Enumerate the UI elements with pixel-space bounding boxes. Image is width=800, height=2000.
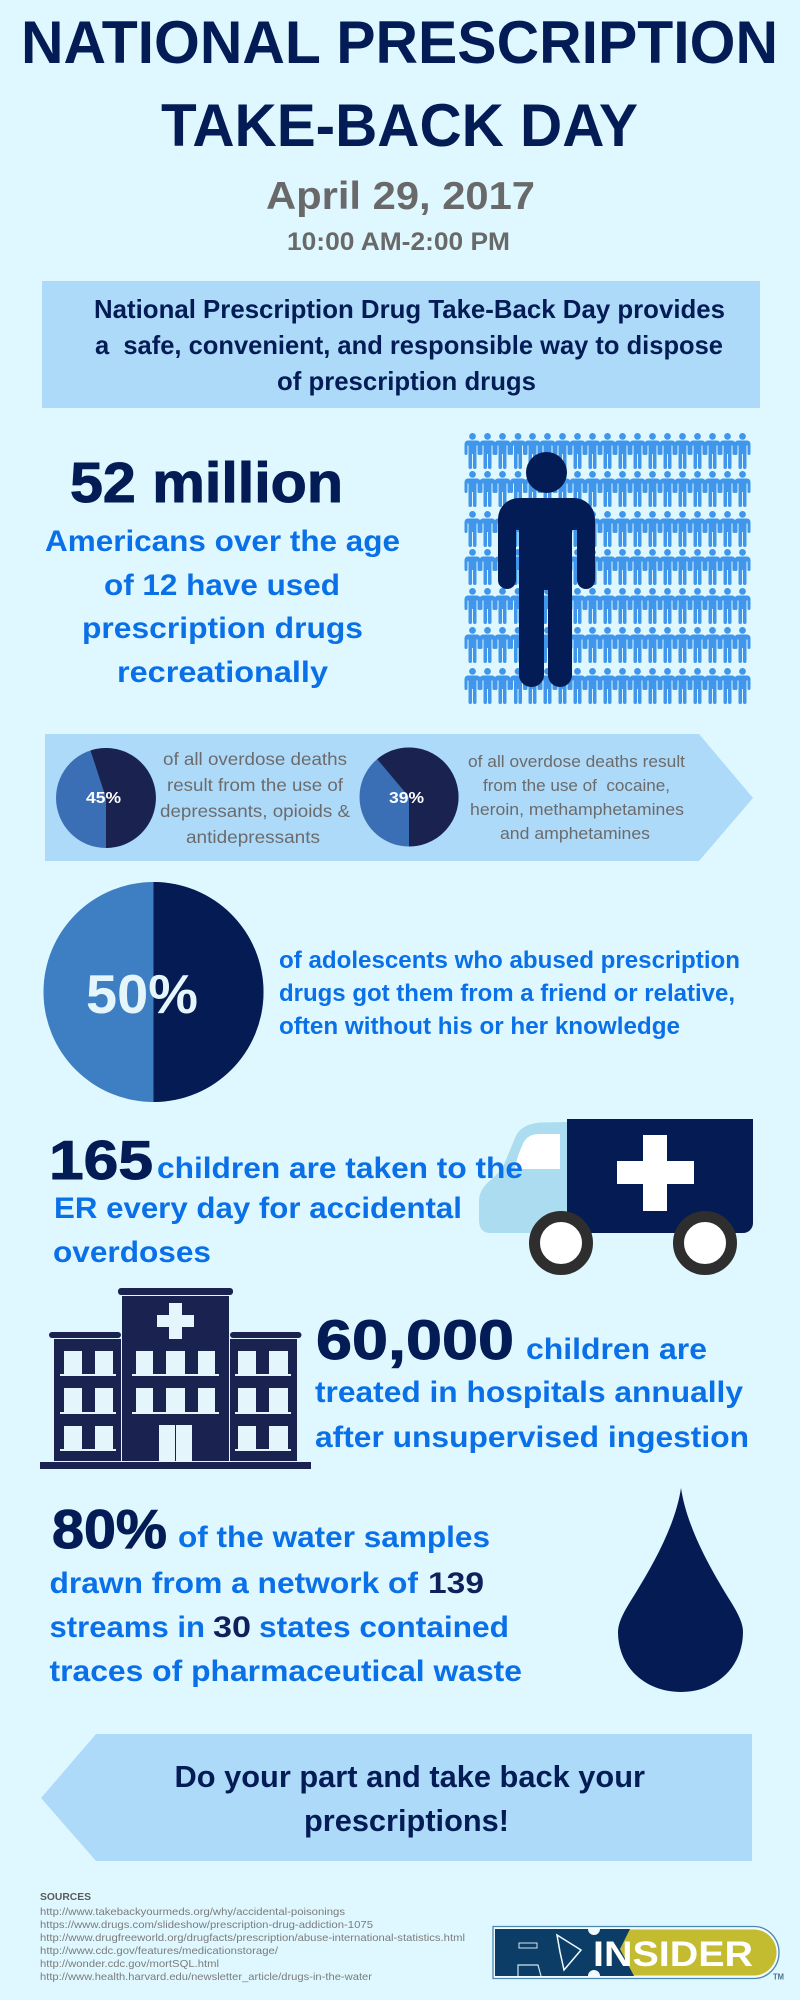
panel: introduction: of prescription drugs xyxy=(277,366,536,396)
text: Americans over the age of 12: recreationally xyxy=(117,656,328,689)
text: children treated in hospitals xyxy=(315,1333,749,1454)
text: Americans over the age of 12: Americans over the age xyxy=(45,525,400,558)
windows xyxy=(60,1303,291,1461)
pie chart: 45%: 45% xyxy=(86,790,121,807)
icon: water drop xyxy=(618,1488,743,1692)
icon: hospital xyxy=(40,1288,311,1469)
text: children treated in hospitals: after unsupervised ingestion xyxy=(315,1421,749,1454)
title: TAKE-BACK DAY xyxy=(161,92,638,159)
text: water samples: 30 xyxy=(213,1611,251,1644)
cross xyxy=(617,1135,694,1211)
sources: http://www.health.harvard.edu/newsletter_article/drugs-in-the-water xyxy=(40,1971,373,1983)
cab xyxy=(479,1122,567,1233)
stat: 60,000: 60,000 xyxy=(316,1308,514,1371)
text: cocaine: of all overdose deaths result xyxy=(468,753,685,771)
text: Americans over the age of 12 xyxy=(45,525,400,689)
panel: call to action arrow xyxy=(41,1734,752,1861)
text: water samples: 139 xyxy=(428,1567,484,1600)
text: depressants: antidepressants xyxy=(186,827,320,847)
pie chart: 50%: 50% xyxy=(86,963,198,1025)
text: water samples: states contained xyxy=(259,1611,509,1644)
text: water samples xyxy=(50,1521,522,1688)
R leg line xyxy=(518,1965,541,1976)
text: adolescents: often without his or her knowledge xyxy=(279,1013,680,1040)
pie chart: 45% xyxy=(56,748,156,848)
text: cocaine: and amphetamines xyxy=(500,825,650,843)
text: cocaine: heroin, methamphetamines xyxy=(470,801,684,819)
stat: 165: 165 xyxy=(49,1129,153,1191)
cargo box xyxy=(567,1119,753,1233)
text: children taken to the ER: ER every day for accidental xyxy=(54,1192,462,1225)
text: water samples: streams in xyxy=(50,1611,205,1644)
text: cocaine xyxy=(468,753,685,843)
icon: large person xyxy=(498,452,595,687)
trademark: TM xyxy=(773,1972,784,1982)
pill outline xyxy=(493,1926,779,1978)
panel: introduction: National Prescription Drug Take-Back Day provides xyxy=(94,294,725,324)
title: NATIONAL PRESCRIPTION xyxy=(21,9,778,76)
date: April 29, 2017 xyxy=(266,175,535,218)
icon: ambulance xyxy=(479,1119,753,1270)
panel: call to action arrow: prescriptions! xyxy=(304,1803,509,1838)
wordmark: INSIDER xyxy=(593,1935,753,1974)
text: depressants: depressants, opioids & xyxy=(160,801,350,821)
wheel xyxy=(678,1216,732,1270)
panel: introduction xyxy=(42,281,760,408)
text: Americans over the age of 12: of 12 have used xyxy=(104,569,340,602)
sources: http://www.takebackyourmeds.org/why/accidental-poisonings xyxy=(40,1906,345,1918)
text: depressants: of all overdose deaths xyxy=(163,749,347,769)
text: water samples: of the water samples xyxy=(178,1521,490,1554)
dark R and X field xyxy=(495,1929,634,1976)
pie chart: 39%: 39% xyxy=(389,790,424,807)
sources: http://www.drugfreeworld.org/drugfacts/prescription/abuse-international-statistics.html xyxy=(40,1932,465,1944)
text: adolescents: of adolescents who abused prescription xyxy=(279,947,740,974)
text: water samples: drawn from a network of xyxy=(50,1567,419,1600)
yellow end xyxy=(620,1930,776,1976)
text: children taken to the ER: children are taken to the xyxy=(157,1152,523,1185)
text: depressants: result from the use of xyxy=(167,775,343,795)
stat: 80%: 80% xyxy=(52,1498,167,1560)
text: adolescents: drugs got them from a friend or relative, xyxy=(279,980,735,1007)
text: cocaine: from the use of cocaine, xyxy=(483,777,670,795)
chevron xyxy=(557,1935,581,1970)
wheel xyxy=(534,1216,588,1270)
panel: introduction: a safe, convenient, and responsible way to dispose xyxy=(95,330,723,360)
text: water samples: traces of pharmaceutical waste xyxy=(50,1655,522,1688)
stat: 52 million: 52 million xyxy=(70,451,343,515)
text: children treated in hospitals: treated in hospitals annually xyxy=(315,1376,743,1409)
title xyxy=(21,9,778,159)
pie chart: 39% xyxy=(360,747,459,846)
sources: https://www.drugs.com/slideshow/prescription-drug-addiction-1075 xyxy=(40,1919,373,1931)
R slot xyxy=(519,1943,537,1948)
text: children taken to the ER: overdoses xyxy=(53,1236,211,1269)
panel: call to action arrow: Do your part and take back your xyxy=(174,1759,645,1794)
panel: overdose deaths arrow xyxy=(45,734,753,861)
sources: http://www.cdc.gov/features/medicationstorage/ xyxy=(40,1945,278,1957)
text: adolescents xyxy=(279,947,740,1040)
text: children taken to the ER xyxy=(53,1152,523,1269)
icon: crowd of people xyxy=(464,433,750,704)
sources: http://wonder.cdc.gov/mortSQL.html xyxy=(40,1958,219,1970)
sources xyxy=(40,1891,465,1983)
logo: Rx Insider xyxy=(493,1926,784,1982)
window xyxy=(515,1134,560,1169)
text: children treated in hospitals: children are xyxy=(526,1333,707,1366)
text: Americans over the age of 12: prescription drugs xyxy=(82,612,363,645)
sources: SOURCES xyxy=(40,1891,91,1903)
pie chart: 50% xyxy=(44,882,264,1102)
time: 10:00 AM-2:00 PM xyxy=(287,228,510,256)
text: depressants xyxy=(160,749,350,847)
